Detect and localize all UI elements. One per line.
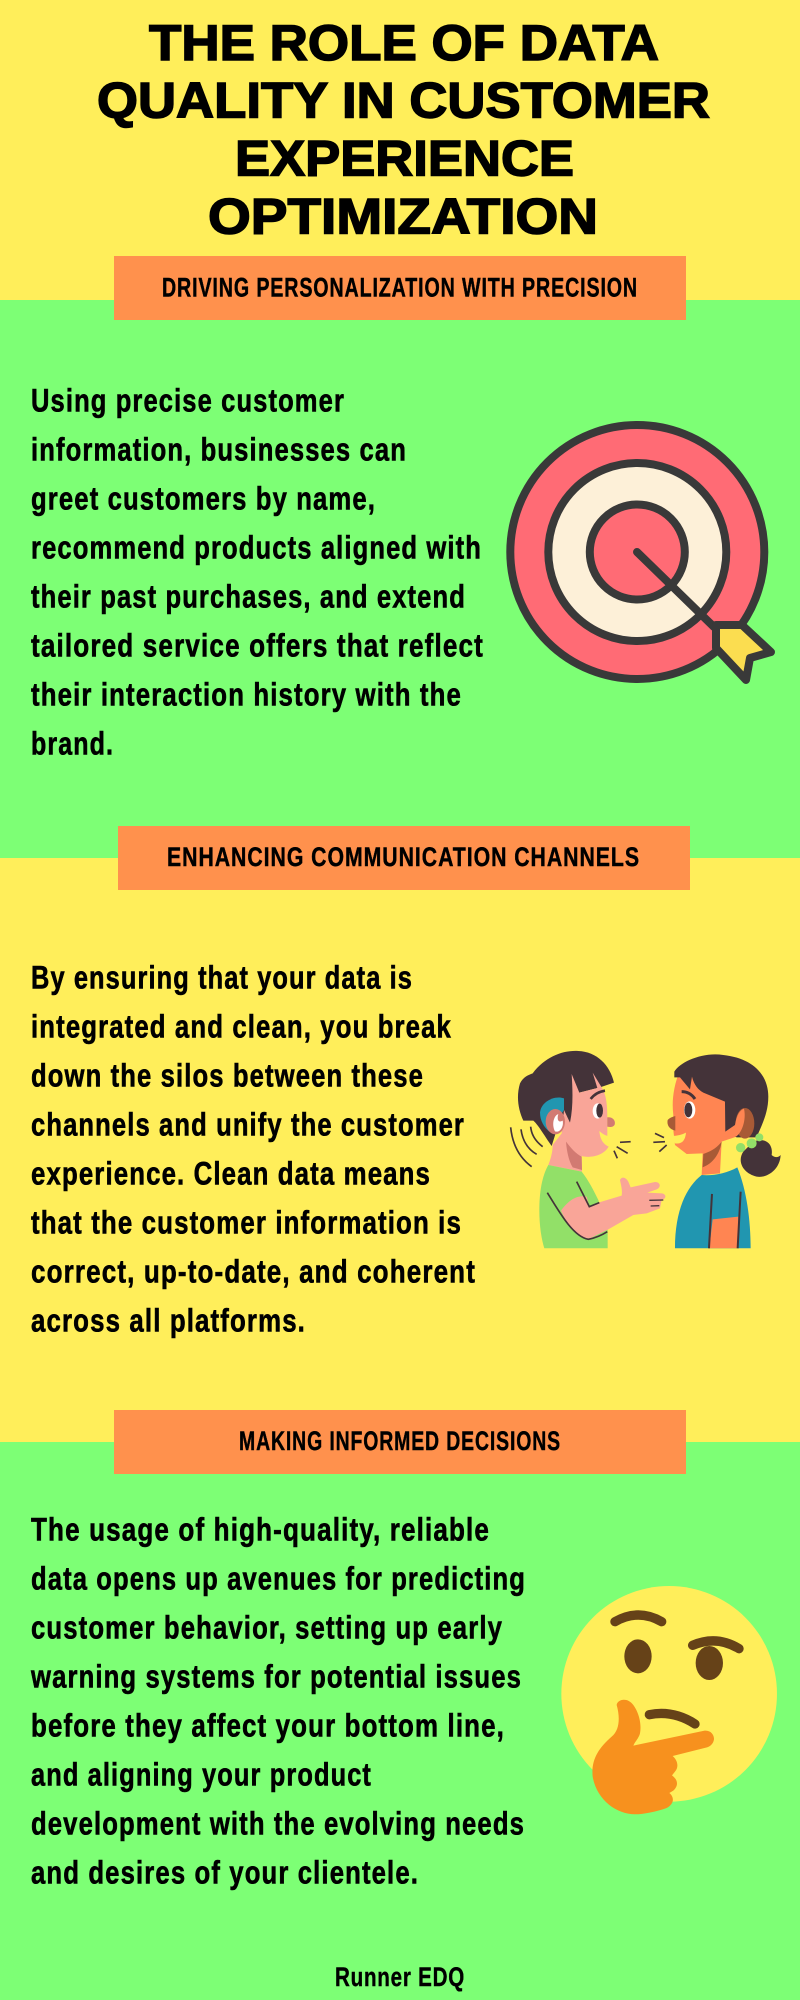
text block: communication body: channels and unify the customer xyxy=(31,1106,465,1142)
heading banner: driving personalization xyxy=(114,256,686,320)
panel: driving personalization xyxy=(31,256,771,761)
text block: decisions body xyxy=(30,1512,526,1891)
heading banner: communication channels xyxy=(118,826,690,890)
sound and speech lines xyxy=(511,1127,667,1167)
text block: personalization body: brand. xyxy=(31,725,114,761)
text block: personalization body: their past purchases, and extend xyxy=(31,578,466,614)
right person xyxy=(667,1054,781,1248)
text block: communication body: across all platforms. xyxy=(31,1302,306,1338)
icon: thinking face xyxy=(561,1586,777,1814)
title: THE ROLE OF DATA xyxy=(149,14,659,71)
text block: personalization body: tailored service offers that reflect xyxy=(31,627,484,663)
title: OPTIMIZATION xyxy=(208,188,598,244)
text block: personalization body xyxy=(31,382,484,761)
panel: making informed decisions xyxy=(30,1410,777,1891)
heading banner: driving personalization: DRIVING PERSONALIZATION WITH PRECISION xyxy=(162,272,638,302)
text block: personalization body: information, businesses can xyxy=(31,431,407,467)
text block: communication body: correct, up-to-date, and coherent xyxy=(31,1253,476,1289)
title: QUALITY IN CUSTOMER xyxy=(97,72,710,128)
text block: decisions body: The usage of high-quality, reliable xyxy=(31,1512,490,1548)
heading banner: informed decisions: MAKING INFORMED DECISIONS xyxy=(239,1426,561,1456)
panel: enhancing communication xyxy=(31,826,781,1338)
text block: personalization body: their interaction history with the xyxy=(31,676,462,712)
title xyxy=(97,14,710,244)
text block: decisions body: and desires of your clientele. xyxy=(31,1855,419,1891)
title: EXPERIENCE xyxy=(235,130,574,186)
heading banner: informed decisions xyxy=(114,1410,686,1474)
footer credit: Runner EDQ xyxy=(335,1962,465,1992)
text block: decisions body: customer behavior, setting up early xyxy=(31,1610,503,1646)
text block: personalization body: greet customers by name, xyxy=(31,480,376,516)
text block: communication body: integrated and clean, you break xyxy=(31,1008,452,1044)
text block: communication body: By ensuring that your data is xyxy=(31,959,413,995)
icon: two people talking xyxy=(511,1051,781,1248)
text block: communication body: that the customer information is xyxy=(31,1204,462,1240)
text block: communication body: down the silos between these xyxy=(31,1057,424,1093)
text block: personalization body: Using precise customer xyxy=(31,382,345,418)
text block: decisions body: development with the evolving needs xyxy=(31,1806,525,1842)
text block: communication body: experience. Clean data means xyxy=(31,1155,431,1191)
text block: personalization body: recommend products aligned with xyxy=(31,529,482,565)
text block: decisions body: and aligning your product xyxy=(31,1757,372,1793)
text block: decisions body: before they affect your bottom line, xyxy=(31,1708,505,1744)
left person xyxy=(518,1051,665,1248)
text block: decisions body: data opens up avenues for predicting xyxy=(31,1561,526,1597)
text block: decisions body: warning systems for potential issues xyxy=(30,1659,522,1695)
heading banner: communication channels: ENHANCING COMMUNICATION CHANNELS xyxy=(167,842,640,872)
icon: target with arrow xyxy=(510,425,771,680)
text block: communication body xyxy=(31,959,476,1338)
